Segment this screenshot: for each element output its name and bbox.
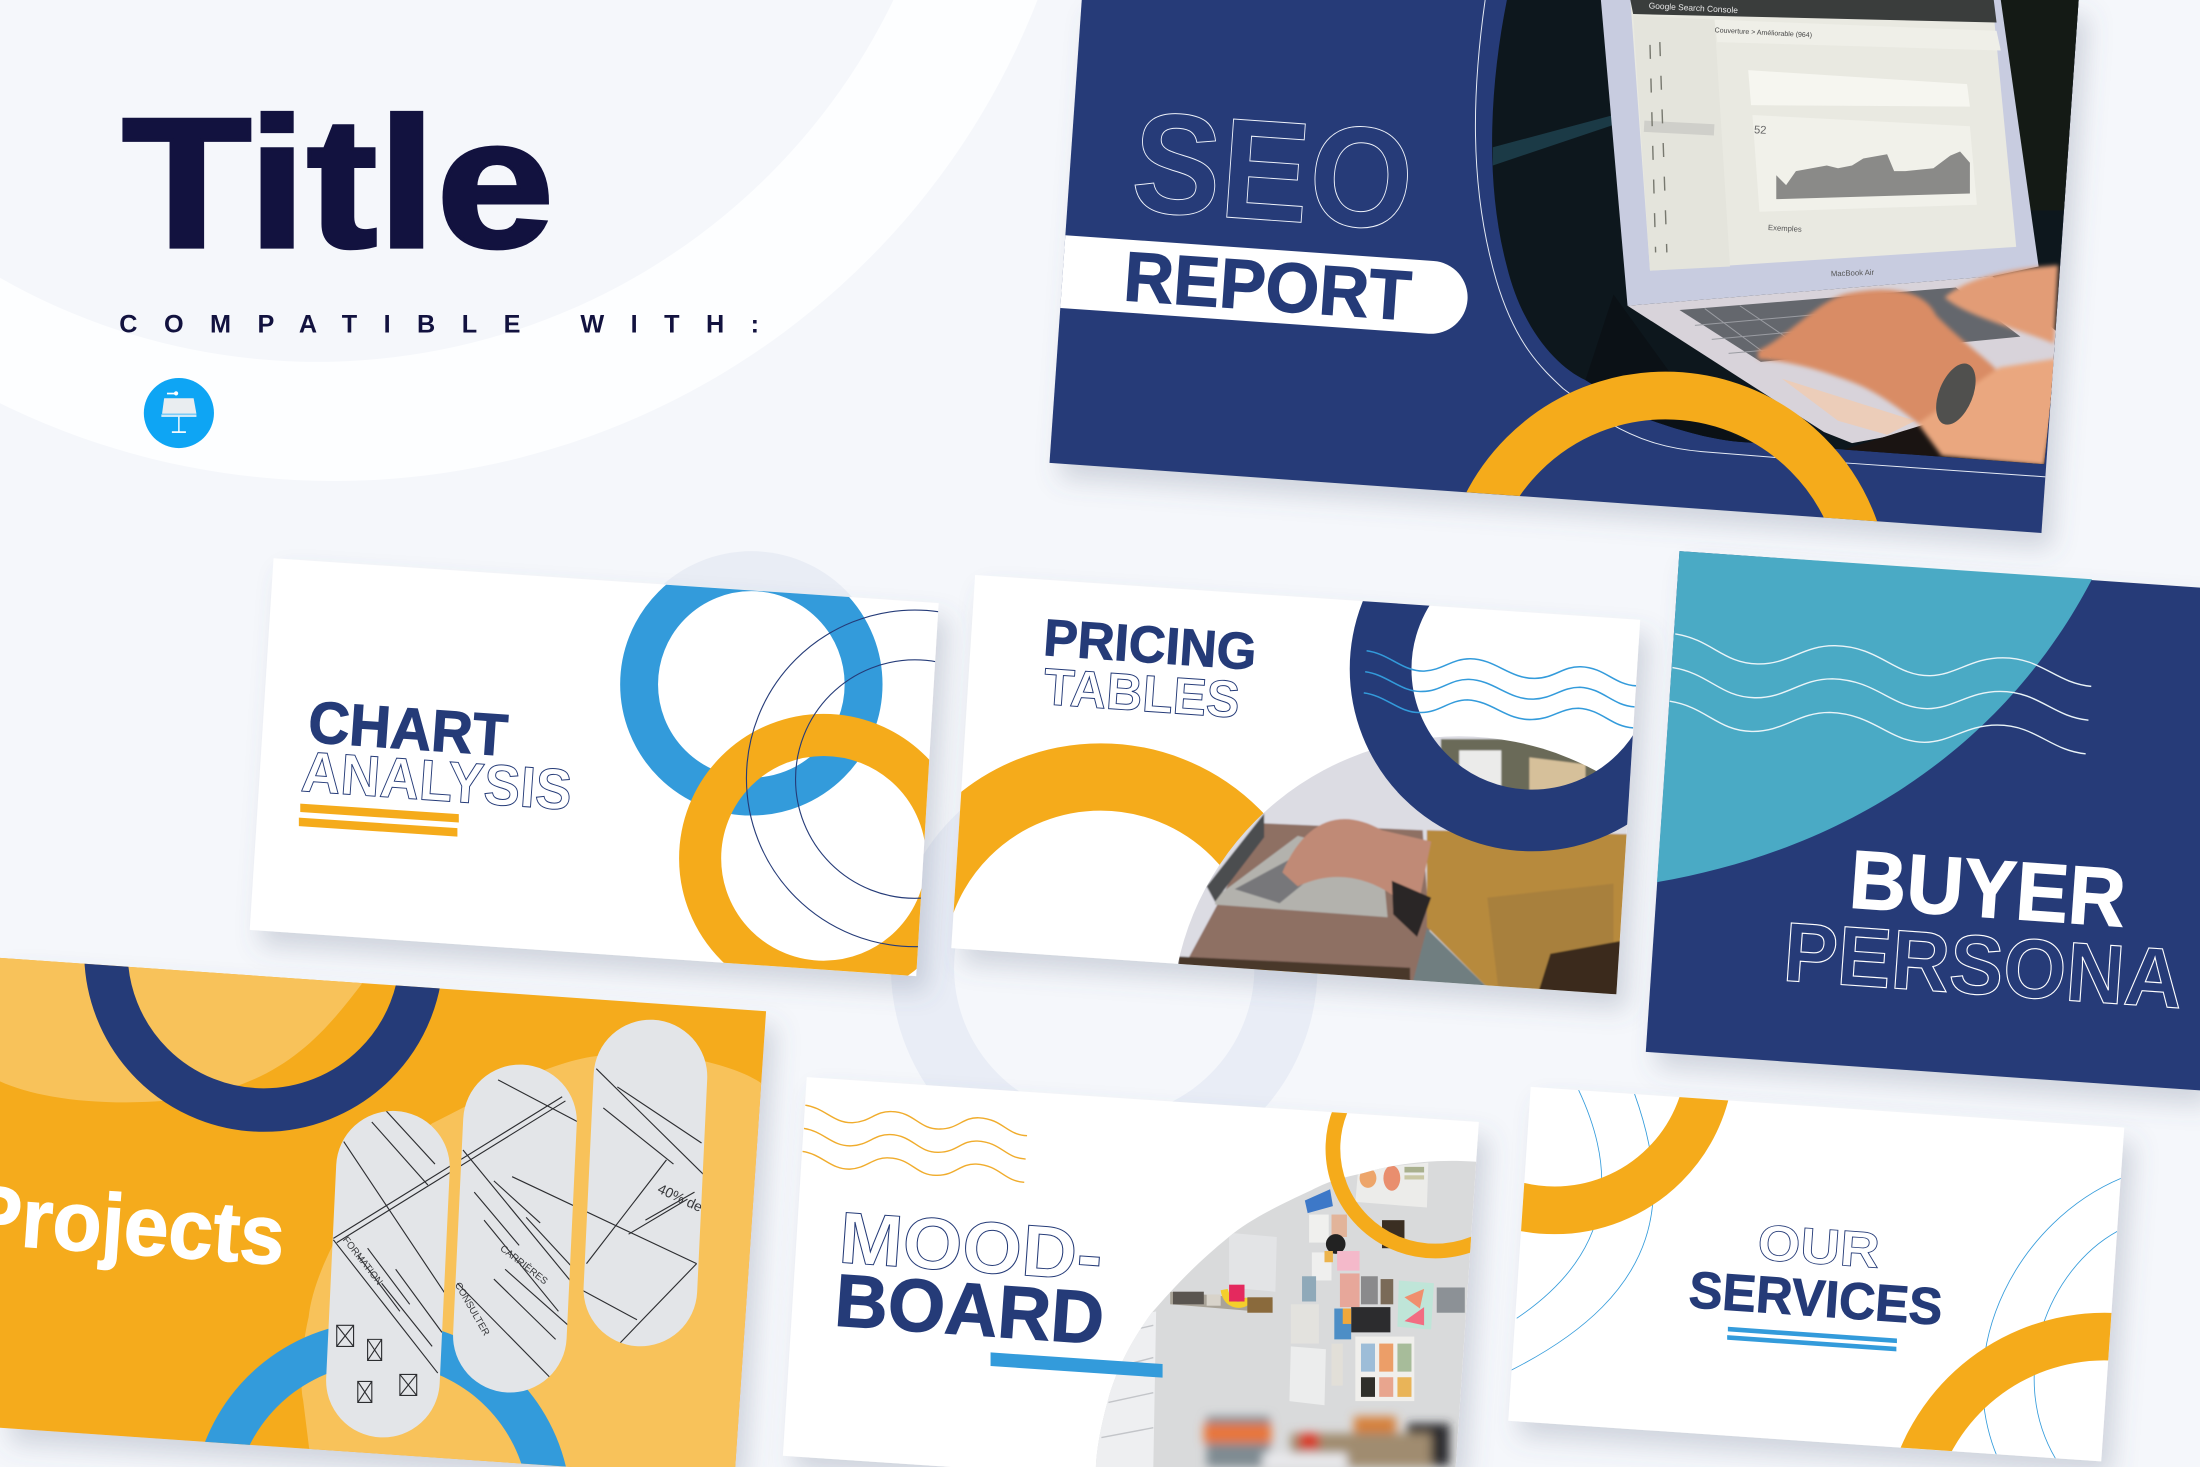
decorative ring behind slides [923, 786, 1286, 1149]
yellow arc top left [1399, 899, 1710, 1210]
chart text: CHART [306, 690, 510, 769]
photo pills: wireframe sketches: CARRIÈRES [498, 1243, 550, 1287]
waves [1364, 651, 1636, 728]
hands [1758, 265, 2062, 466]
white sheets [1291, 1304, 1319, 1344]
laptop base [1628, 276, 2062, 443]
yellow ring [700, 735, 947, 982]
panel: buyer persona slide [1646, 551, 2200, 1090]
blue ring [639, 572, 864, 797]
our outline text: OUR [1756, 1214, 1882, 1279]
panel: our services slide [1399, 899, 2133, 1467]
photo: laptop on desk: 52 [1754, 124, 1767, 137]
photo pills: wireframe sketches: 40% de [655, 1180, 705, 1215]
subtitle: compatible with: COMPATIBLE WITH: [119, 310, 759, 338]
shelf [1170, 1292, 1273, 1313]
yellow arc [1466, 372, 1878, 522]
laptop [1215, 836, 1388, 917]
seo outline text: SEO [1127, 82, 1418, 261]
icon: keynote [144, 378, 214, 448]
thin blue arcs [1511, 1090, 2121, 1459]
hands [1282, 819, 1431, 898]
blue ring [197, 1321, 566, 1467]
teal shoe card [1397, 1280, 1434, 1330]
panel: moodboard slide [783, 1046, 1538, 1467]
desk [1176, 823, 1431, 982]
thin white line [1475, 0, 2046, 477]
yellow arc bottom right [1893, 1313, 2133, 1467]
laptop screen [1630, 0, 2016, 271]
decorative white arc top left [0, 0, 1089, 481]
blue bar [991, 1352, 1163, 1378]
double underline [299, 804, 459, 837]
keyboard [1679, 288, 2020, 362]
panel: pricing tables slide [952, 575, 1658, 1018]
navy ring [1350, 601, 1633, 852]
light blob bottom right [301, 1053, 766, 1467]
white slat door [1094, 1311, 1156, 1467]
services text: SERVICES [1687, 1260, 1944, 1336]
photo: laptop on desk: Couverture > Améliorable (964) [1714, 27, 1812, 39]
chart in laptop screen [1776, 151, 1970, 199]
analysis outline text: ANALYSIS [299, 740, 574, 823]
thin navy circles [746, 610, 938, 948]
waves [803, 1105, 1027, 1182]
small pinned papers [1309, 1215, 1329, 1243]
board text: BOARD [832, 1259, 1107, 1360]
mood text outline: MOOD- [837, 1197, 1105, 1297]
buyer text: BUYER [1847, 833, 2129, 945]
photo pills: wireframe sketches [309, 1010, 730, 1459]
tables outline text: TABLES [1042, 657, 1242, 729]
report text: REPORT [1121, 237, 1414, 335]
light blob top left [0, 954, 363, 1102]
wristwatch [1936, 364, 1976, 425]
panel: seo report slide [1050, 0, 2096, 556]
photo: hands typing [1178, 736, 1627, 994]
white pill [1060, 235, 1468, 334]
photo: laptop on desk [1473, 0, 2091, 477]
title: Title [122, 80, 554, 287]
double blue underline [1727, 1327, 1897, 1351]
teal shape [1657, 551, 2092, 882]
laptop lid [1601, 0, 2039, 306]
pale poster [1229, 1233, 1277, 1292]
panel: chart analysis slide [250, 558, 956, 999]
decorative halo behind chart slide [618, 551, 885, 818]
photo: laptop on desk: MacBook Air [1831, 268, 1875, 278]
photo: laptop on desk: Google Search Console [1648, 0, 1738, 15]
photo: laptop on desk: Exemples [1768, 223, 1802, 234]
photo pills: wireframe sketches: CONSULTER [452, 1281, 491, 1338]
persona outline text: PERSONA [1781, 905, 2186, 1026]
sweater [1426, 829, 1626, 986]
panel: projects slide [0, 958, 784, 1467]
yellow arc [954, 743, 1325, 974]
art print [1355, 1337, 1414, 1401]
navy ring [106, 795, 422, 1110]
pricing text: PRICING [1042, 608, 1258, 681]
photo pills: wireframe sketches: FORMATION [340, 1235, 384, 1287]
top paper with orange blobs [1355, 1163, 1428, 1208]
photo: moodboard wall [1094, 1157, 1487, 1467]
blurred objects [1204, 1417, 1449, 1467]
white waves [1670, 634, 2091, 754]
yellow ring [1333, 1046, 1538, 1251]
